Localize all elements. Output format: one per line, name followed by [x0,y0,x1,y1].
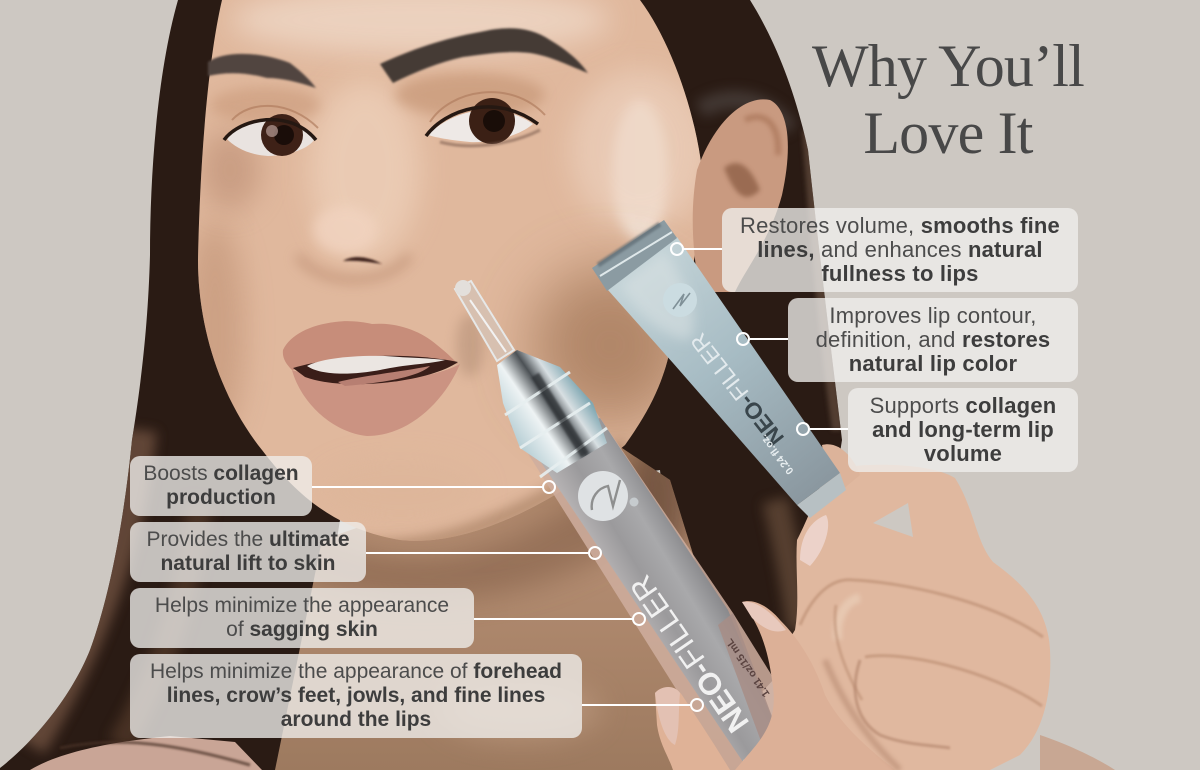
background gap between fingers [873,503,913,537]
callout: forehead lines: Helps minimize the appearance of forehead [150,660,562,683]
callout: lift: natural lift to skin [160,552,336,575]
callout: forehead lines: around the lips [281,708,431,731]
callout: lift [130,522,366,582]
callout: contour: natural lip color [849,351,1017,376]
callout: sagging: Helps minimize the appearance [155,594,449,617]
callout: volume [722,208,1078,292]
product: small tube [592,220,846,518]
lips [283,321,460,436]
callout: contour: Improves lip contour, [829,303,1037,328]
callout: forehead lines: lines, crow’s feet, jowls, and fine lines [167,684,545,707]
callout: collagen volume [848,388,1078,472]
callout: volume: fullness to lips [821,261,979,286]
callout: collagen volume: Supports collagen [870,393,1056,418]
eyebrows [208,28,588,88]
callout: boosts collagen [130,456,312,516]
title: Love It [863,100,1033,166]
callout: boosts collagen: production [166,486,276,509]
callout: lift: Provides the ultimate [146,528,350,551]
callout: sagging: of sagging skin [226,618,378,641]
title: Why You’ll [812,33,1084,99]
callout: forehead lines [130,654,582,738]
callout: contour [788,298,1078,382]
eye: right [426,92,545,146]
callout: boosts collagen: Boosts collagen [143,462,299,485]
ear [693,99,788,292]
product: pen: NEO-FILLER [623,569,756,739]
hair [0,0,842,770]
product: pen [455,280,815,770]
callout: volume: Restores volume, smooths fine [740,213,1060,238]
shoulder [30,735,1115,770]
callout: collagen volume: volume [924,441,1002,466]
eye: left [224,106,318,156]
title [812,33,1084,166]
product: pen: 1.41 oz/15 mL [723,636,772,699]
product: small tube: 0.24 fl.oz. [758,432,796,477]
callout: sagging [130,588,474,648]
nose [298,206,410,279]
fingers [655,515,1043,770]
callout: contour: definition, and restores [816,327,1050,352]
neck [275,448,742,770]
callout: collagen volume: and long-term lip [872,417,1054,442]
callout: volume: lines, and enhances natural [757,237,1043,262]
hand back [781,444,1050,770]
product: small tube: NEO-FILLER [685,328,789,451]
face [198,0,701,541]
